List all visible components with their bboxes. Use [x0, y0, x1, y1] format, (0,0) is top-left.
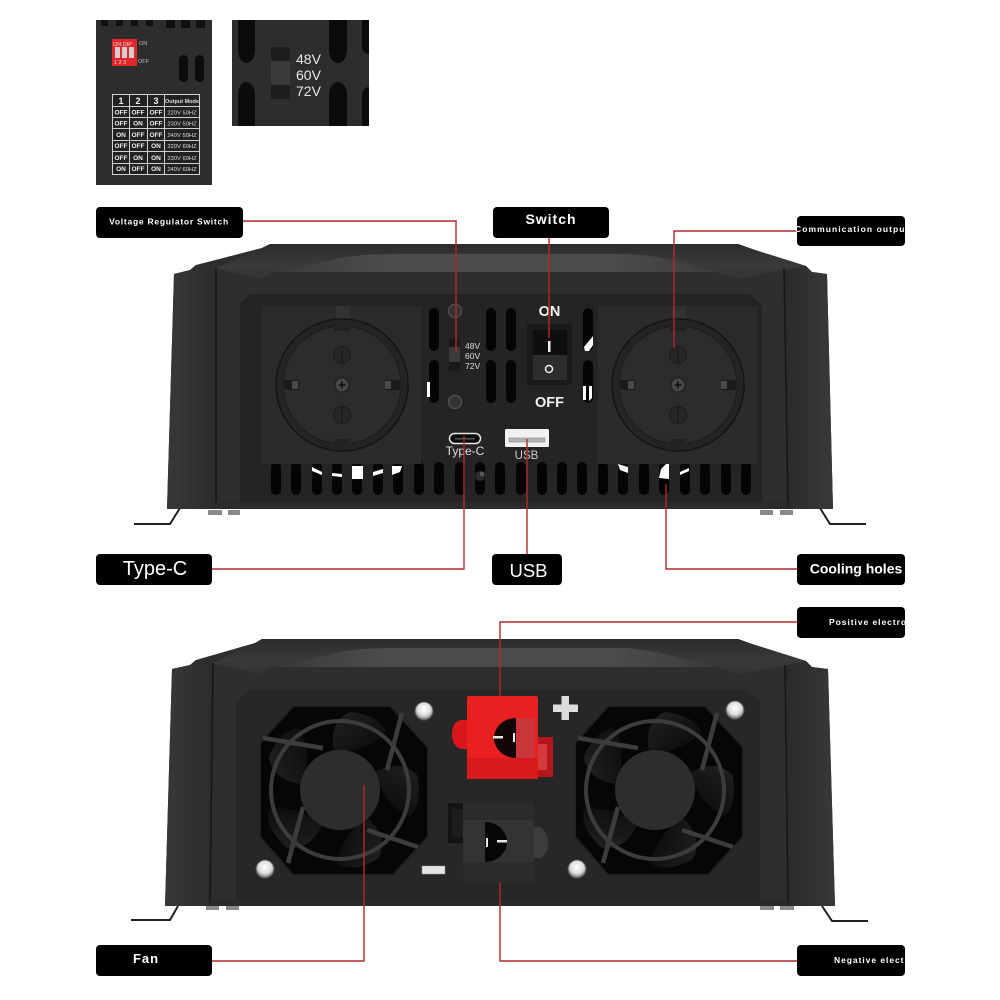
icon: red DIP switch: 1 2 3	[114, 60, 126, 66]
panel: inverter front view	[134, 244, 866, 524]
callout: Positive electrode: Positive electrode	[829, 617, 919, 627]
icon: black negative terminal	[448, 802, 548, 883]
voltage labels: 72V	[465, 361, 480, 371]
callout: Communication output: Communication output	[795, 224, 909, 234]
callout: Fan: Fan	[133, 951, 159, 966]
output mode table: OFF	[132, 110, 145, 116]
voltage labels: 72V	[296, 83, 322, 99]
output mode table: Output Mode	[165, 99, 199, 105]
panel: DIP switch table photo	[96, 20, 212, 185]
casing	[167, 244, 833, 509]
icon: red DIP switch: ON DIP	[113, 42, 132, 48]
output mode table	[112, 94, 200, 174]
voltage labels: 48V	[465, 341, 480, 351]
switch position labels: ON	[139, 41, 147, 47]
output mode table: ON	[116, 166, 126, 173]
output mode table: OFF	[132, 132, 145, 139]
voltage labels	[296, 51, 322, 99]
output mode table: 240V 50HZ	[167, 133, 197, 139]
output mode table: 220V 50HZ	[167, 110, 197, 116]
output mode table: OFF	[150, 132, 163, 139]
icon: chrome screws	[256, 701, 744, 878]
feet wires	[131, 906, 868, 921]
callout: USB: USB	[509, 560, 548, 581]
Type-C port label: Type-C	[446, 444, 485, 458]
output mode table: ON	[151, 143, 161, 150]
switch labels: OFF	[535, 395, 564, 411]
callout: Switch: Switch	[525, 211, 577, 227]
output mode table: ON	[151, 166, 161, 173]
casing	[165, 639, 835, 906]
callout: Negative electrode	[797, 945, 905, 976]
callout: Switch	[493, 207, 609, 238]
icon: right fan	[572, 706, 743, 880]
icon: USB port	[505, 429, 549, 447]
callout: Cooling holes: Cooling holes	[810, 560, 902, 576]
switch position labels	[138, 41, 150, 65]
output mode table: OFF	[114, 110, 128, 116]
callout: Cooling holes	[797, 554, 905, 585]
feet wires	[134, 508, 866, 524]
output mode table: OFF	[132, 143, 145, 150]
output mode table: 2	[135, 96, 141, 106]
output mode table: ON	[133, 155, 143, 162]
output mode table: OFF	[132, 166, 145, 173]
output mode table: ON	[116, 132, 126, 139]
upper vent slots	[429, 308, 593, 403]
icon: red DIP switch	[112, 39, 137, 66]
callout: Communication output	[795, 216, 909, 246]
output mode table: 230V 50HZ	[167, 122, 197, 128]
icon: USB-C port	[450, 434, 480, 444]
output mode table: OFF	[114, 155, 128, 162]
callout: Negative electrode: Negative electrode	[834, 955, 927, 965]
output mode table: OFF	[114, 120, 128, 128]
callout: Fan	[96, 945, 212, 976]
white fan glimpses through slots	[312, 464, 689, 479]
USB port label: USB	[515, 450, 539, 462]
switch position labels: OFF	[138, 59, 150, 65]
output mode table: 230V 60HZ	[167, 156, 197, 162]
output mode table: OFF	[150, 110, 163, 116]
icon: right socket	[598, 306, 757, 464]
icon: left socket	[262, 306, 421, 464]
callout leader lines	[212, 221, 797, 961]
output mode table: 220V 60HZ	[167, 144, 197, 150]
output mode table: ON	[151, 155, 161, 162]
panel: voltage selector photo	[232, 20, 369, 126]
voltage labels	[465, 341, 480, 371]
callout: Type-C: Type-C	[123, 558, 187, 580]
icon: red positive terminal	[452, 696, 553, 779]
output mode table: OFF	[114, 143, 128, 150]
output mode table: 1	[118, 96, 124, 106]
callout: Voltage Regulator Switch: Voltage Regulator Switch	[109, 216, 229, 226]
icon: voltage slider	[449, 339, 460, 371]
panel: inverter rear view	[131, 639, 868, 921]
callout: Positive electrode	[797, 607, 905, 638]
icon: voltage slider	[271, 47, 290, 99]
icon: minus sign	[422, 866, 445, 874]
icon: mounting screws	[448, 304, 462, 408]
icon: plus sign	[553, 696, 578, 720]
output mode table: 240V 60HZ	[167, 167, 197, 173]
voltage labels: 60V	[465, 351, 480, 361]
cooling slots	[271, 462, 751, 495]
switch labels: ON	[539, 304, 560, 320]
icon: left fan	[257, 706, 428, 880]
output mode table: OFF	[150, 120, 163, 128]
callout: USB	[492, 554, 562, 585]
output mode table: 3	[153, 96, 159, 106]
voltage labels: 48V	[296, 51, 322, 67]
callout: Voltage Regulator Switch	[96, 207, 243, 238]
voltage labels: 60V	[296, 67, 322, 83]
callout: Type-C	[96, 554, 212, 585]
output mode table: ON	[133, 120, 143, 128]
icon: rocker switch	[527, 324, 572, 385]
switch labels	[535, 304, 564, 411]
